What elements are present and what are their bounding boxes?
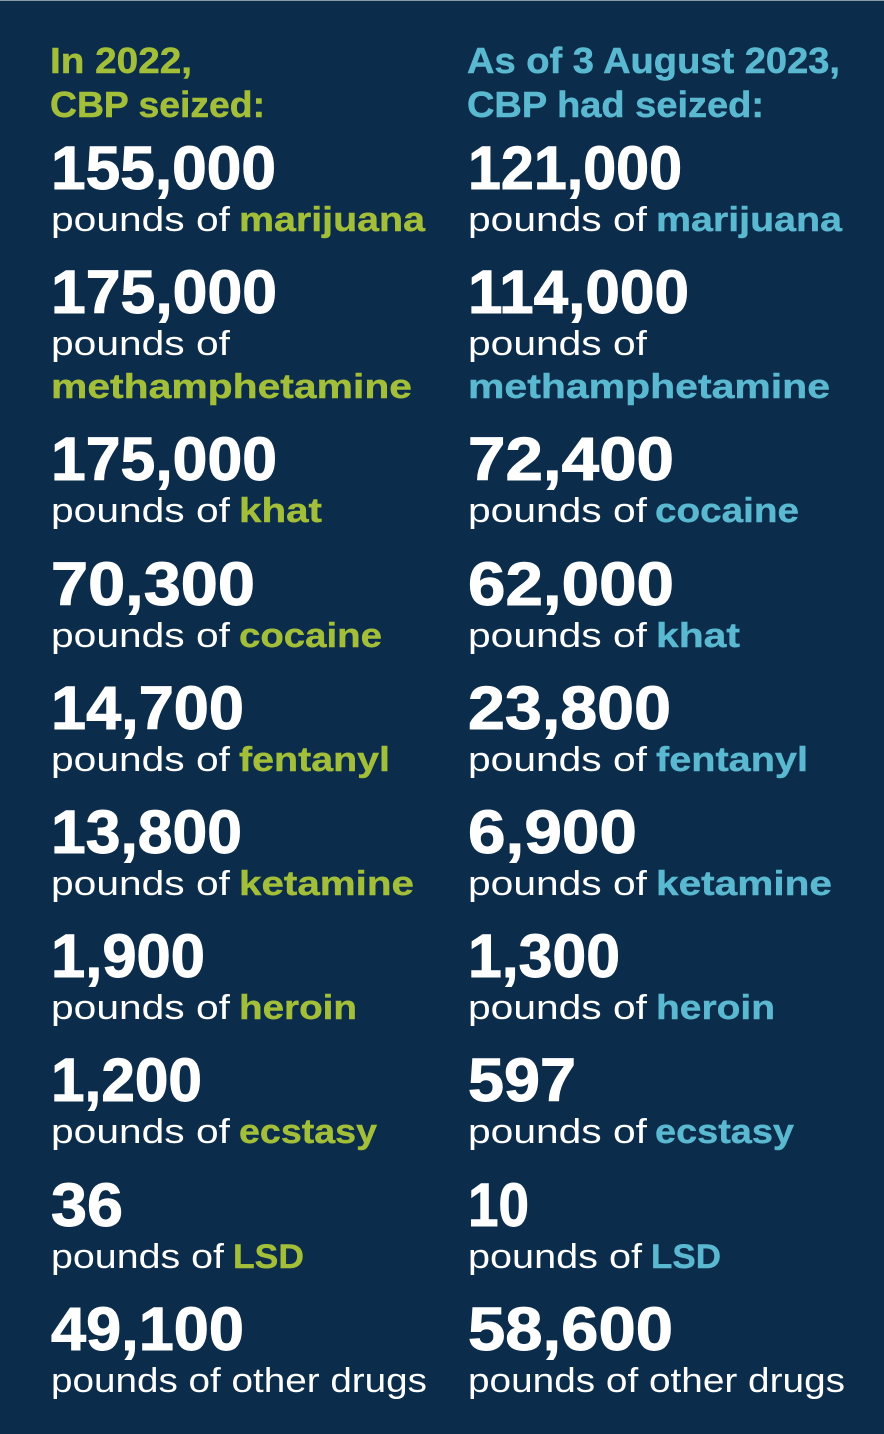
stat: cocaine 2022: cocaine <box>239 617 382 655</box>
stat: heroin 2023: heroin <box>656 989 775 1027</box>
stat: khat 2023: pounds of <box>468 617 648 655</box>
stat: ketamine 2023: 6,900 <box>468 798 637 866</box>
stat: ecstasy 2022: 1,200 <box>51 1046 202 1114</box>
stat: ketamine 2022: 13,800 <box>51 798 242 866</box>
stat: khat 2022 <box>51 425 322 530</box>
stat: methamphetamine 2023 <box>468 258 830 406</box>
stat: cocaine 2022: 70,300 <box>51 550 255 618</box>
stat: khat 2022: 175,000 <box>51 425 277 493</box>
stat: fentanyl 2022 <box>51 674 390 779</box>
panel: 2022 seizures <box>50 40 427 1400</box>
stat: fentanyl 2022: fentanyl <box>239 741 390 779</box>
stat: khat 2022: khat <box>239 492 322 530</box>
stat: other drugs 2023: 58,600 <box>468 1295 673 1363</box>
heading: As of 3 August 2023, CBP had seized: As of 3 August 2023, <box>467 40 840 81</box>
stat: LSD 2022 <box>51 1171 304 1276</box>
heading: In 2022, CBP seized: In 2022, <box>50 40 192 81</box>
stat: other drugs 2022: pounds of other drugs <box>51 1362 427 1400</box>
stat: methamphetamine 2022: pounds of <box>51 325 231 363</box>
stat: cocaine 2023: cocaine <box>655 492 799 530</box>
stat: cocaine 2023 <box>468 425 799 530</box>
stat: fentanyl 2023: 23,800 <box>468 674 671 742</box>
stat: khat 2023 <box>468 550 740 655</box>
panel: 2023 seizures <box>467 40 845 1400</box>
stat: other drugs 2022 <box>51 1295 427 1400</box>
stat: fentanyl 2022: pounds of <box>51 741 231 779</box>
stat: ketamine 2022: ketamine <box>239 865 414 903</box>
stat: khat 2022: pounds of <box>51 492 231 530</box>
stat: other drugs 2023 <box>468 1295 845 1400</box>
stat: marijuana 2023: marijuana <box>656 201 843 239</box>
stat: methamphetamine 2023: pounds of <box>468 325 648 363</box>
stat: fentanyl 2023: pounds of <box>468 741 648 779</box>
stat: heroin 2022 <box>51 922 357 1027</box>
stat: LSD 2022: LSD <box>233 1238 304 1276</box>
stat: ecstasy 2023: pounds of <box>468 1113 648 1151</box>
stat: marijuana 2022: 155,000 <box>51 134 276 202</box>
heading: As of 3 August 2023, CBP had seized: CBP had seized: <box>467 84 764 125</box>
stat: heroin 2023: pounds of <box>468 989 648 1027</box>
stat: ketamine 2023: pounds of <box>468 865 648 903</box>
heading: As of 3 August 2023, CBP had seized <box>467 40 840 125</box>
stat: marijuana 2023: pounds of <box>468 201 648 239</box>
stat: ecstasy 2022 <box>51 1046 377 1151</box>
stat: marijuana 2022: pounds of <box>51 201 231 239</box>
stat: methamphetamine 2023: 114,000 <box>468 258 689 326</box>
stat: heroin 2023 <box>468 922 775 1027</box>
heading: In 2022, CBP seized <box>50 40 265 125</box>
stat: LSD 2023: 10 <box>468 1171 529 1239</box>
stat: ketamine 2023: ketamine <box>656 865 832 903</box>
stat: marijuana 2023 <box>468 134 843 239</box>
stat: ketamine 2023 <box>468 798 832 903</box>
stat: heroin 2022: heroin <box>239 989 357 1027</box>
stat: fentanyl 2023 <box>468 674 808 779</box>
stat: marijuana 2022: marijuana <box>239 201 426 239</box>
stat: ecstasy 2022: ecstasy <box>239 1113 377 1151</box>
stat: ecstasy 2023: 597 <box>468 1046 576 1114</box>
stat: LSD 2023: LSD <box>651 1238 721 1276</box>
stat: other drugs 2023: pounds of other drugs <box>468 1362 845 1400</box>
stat: fentanyl 2023: fentanyl <box>656 741 808 779</box>
stat: marijuana 2022 <box>51 134 426 239</box>
stat: heroin 2023: 1,300 <box>468 922 620 990</box>
stat: other drugs 2022: 49,100 <box>51 1295 244 1363</box>
stat: methamphetamine 2023: methamphetamine <box>468 368 830 406</box>
stat: fentanyl 2022: 14,700 <box>51 674 244 742</box>
stat: khat 2023: 62,000 <box>468 550 674 618</box>
stat: methamphetamine 2022 <box>51 258 412 406</box>
stat: methamphetamine 2022: 175,000 <box>51 258 277 326</box>
stat: ketamine 2022 <box>51 798 414 903</box>
stat: LSD 2022: 36 <box>51 1171 123 1239</box>
stat: ecstasy 2022: pounds of <box>51 1113 231 1151</box>
stat: methamphetamine 2022: methamphetamine <box>51 368 412 406</box>
stat: ecstasy 2023 <box>468 1046 794 1151</box>
stat: cocaine 2023: 72,400 <box>468 425 674 493</box>
stat: ecstasy 2023: ecstasy <box>655 1113 794 1151</box>
stat: LSD 2023: pounds of <box>468 1238 643 1276</box>
stat: LSD 2022: pounds of <box>51 1238 225 1276</box>
stat: khat 2023: khat <box>656 617 740 655</box>
stat: cocaine 2023: pounds of <box>468 492 648 530</box>
stat: heroin 2022: 1,900 <box>51 922 205 990</box>
heading: In 2022, CBP seized: CBP seized: <box>50 84 265 125</box>
stat: cocaine 2022: pounds of <box>51 617 231 655</box>
stat: LSD 2023 <box>468 1171 721 1276</box>
stat: marijuana 2023: 121,000 <box>468 134 682 202</box>
stat: cocaine 2022 <box>51 550 382 655</box>
stat: heroin 2022: pounds of <box>51 989 231 1027</box>
stat: ketamine 2022: pounds of <box>51 865 231 903</box>
